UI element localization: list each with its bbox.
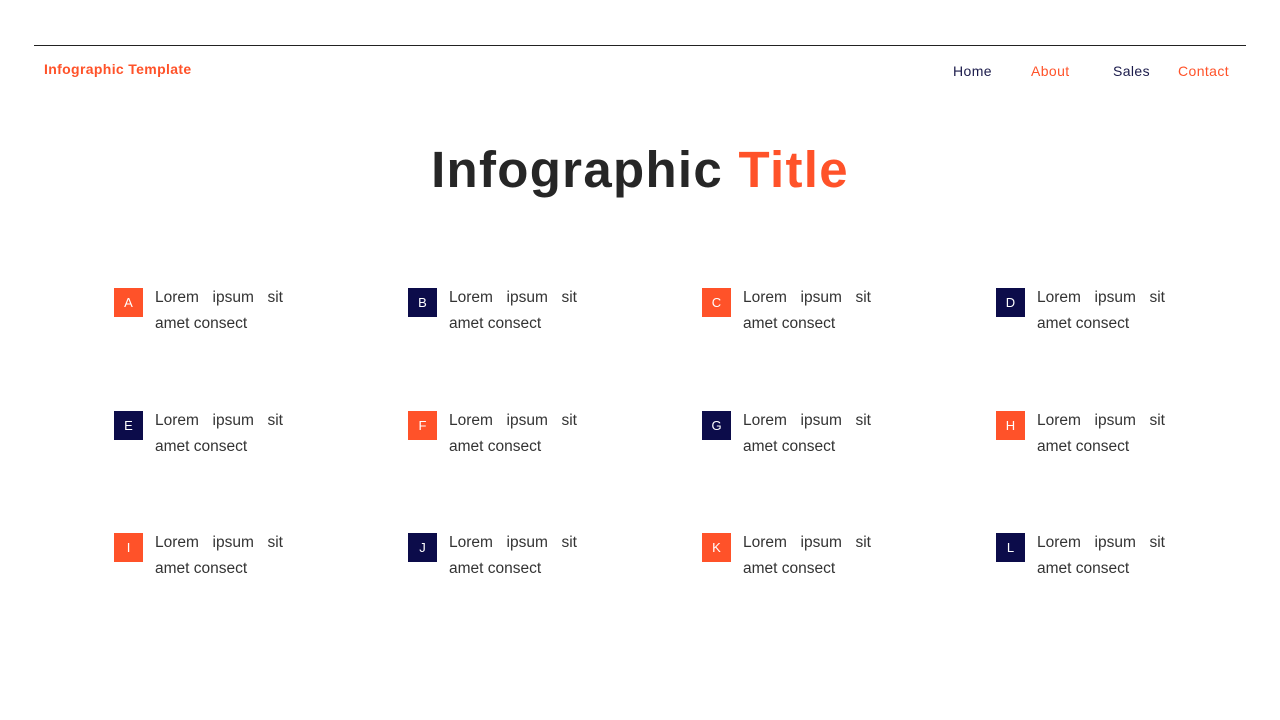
item C: Lorem ipsum sit [743, 289, 871, 306]
item K [702, 533, 871, 577]
item J: amet consect [449, 560, 541, 577]
item H: H [1006, 418, 1015, 433]
item A [114, 288, 283, 332]
item G [702, 411, 871, 455]
item L: Lorem ipsum sit [1037, 534, 1165, 551]
title: Infographic Title [431, 141, 849, 198]
item E: Lorem ipsum sit [155, 412, 283, 429]
item I: Lorem ipsum sit [155, 534, 283, 551]
item C: C [712, 295, 721, 310]
item I: amet consect [155, 560, 247, 577]
item C [702, 288, 871, 332]
item E: E [124, 418, 133, 433]
item K: K [712, 540, 721, 555]
item G: Lorem ipsum sit [743, 412, 871, 429]
item K: amet consect [743, 560, 835, 577]
item J: Lorem ipsum sit [449, 534, 577, 551]
brand label: Infographic Template [44, 61, 192, 77]
item C: amet consect [743, 315, 835, 332]
item H: Lorem ipsum sit [1037, 412, 1165, 429]
item F: Lorem ipsum sit [449, 412, 577, 429]
item I [114, 533, 283, 577]
item I: I [127, 540, 130, 555]
item G: G [711, 418, 722, 433]
item J: J [419, 540, 426, 555]
item J [408, 533, 577, 577]
nav menu [953, 63, 1229, 79]
item A: A [124, 295, 133, 310]
item F: F [419, 418, 426, 433]
item A: Lorem ipsum sit [155, 289, 283, 306]
item G: amet consect [743, 438, 835, 455]
item H: amet consect [1037, 438, 1129, 455]
nav menu: Home [953, 63, 992, 79]
item E [114, 411, 283, 455]
item F: amet consect [449, 438, 541, 455]
item D: D [1006, 295, 1015, 310]
item K: Lorem ipsum sit [743, 534, 871, 551]
item H [996, 411, 1165, 455]
item D: amet consect [1037, 315, 1129, 332]
item B: amet consect [449, 315, 541, 332]
item F [408, 411, 577, 455]
nav menu: Sales [1113, 63, 1150, 79]
item B [408, 288, 577, 332]
nav menu: About [1031, 63, 1070, 79]
item D [996, 288, 1165, 332]
item L: amet consect [1037, 560, 1129, 577]
item L [996, 533, 1165, 577]
item B: Lorem ipsum sit [449, 289, 577, 306]
item A: amet consect [155, 315, 247, 332]
nav menu: Contact [1178, 63, 1229, 79]
item L: L [1007, 540, 1014, 555]
item E: amet consect [155, 438, 247, 455]
item D: Lorem ipsum sit [1037, 289, 1165, 306]
item B: B [418, 295, 427, 310]
grid of items [114, 288, 1165, 577]
